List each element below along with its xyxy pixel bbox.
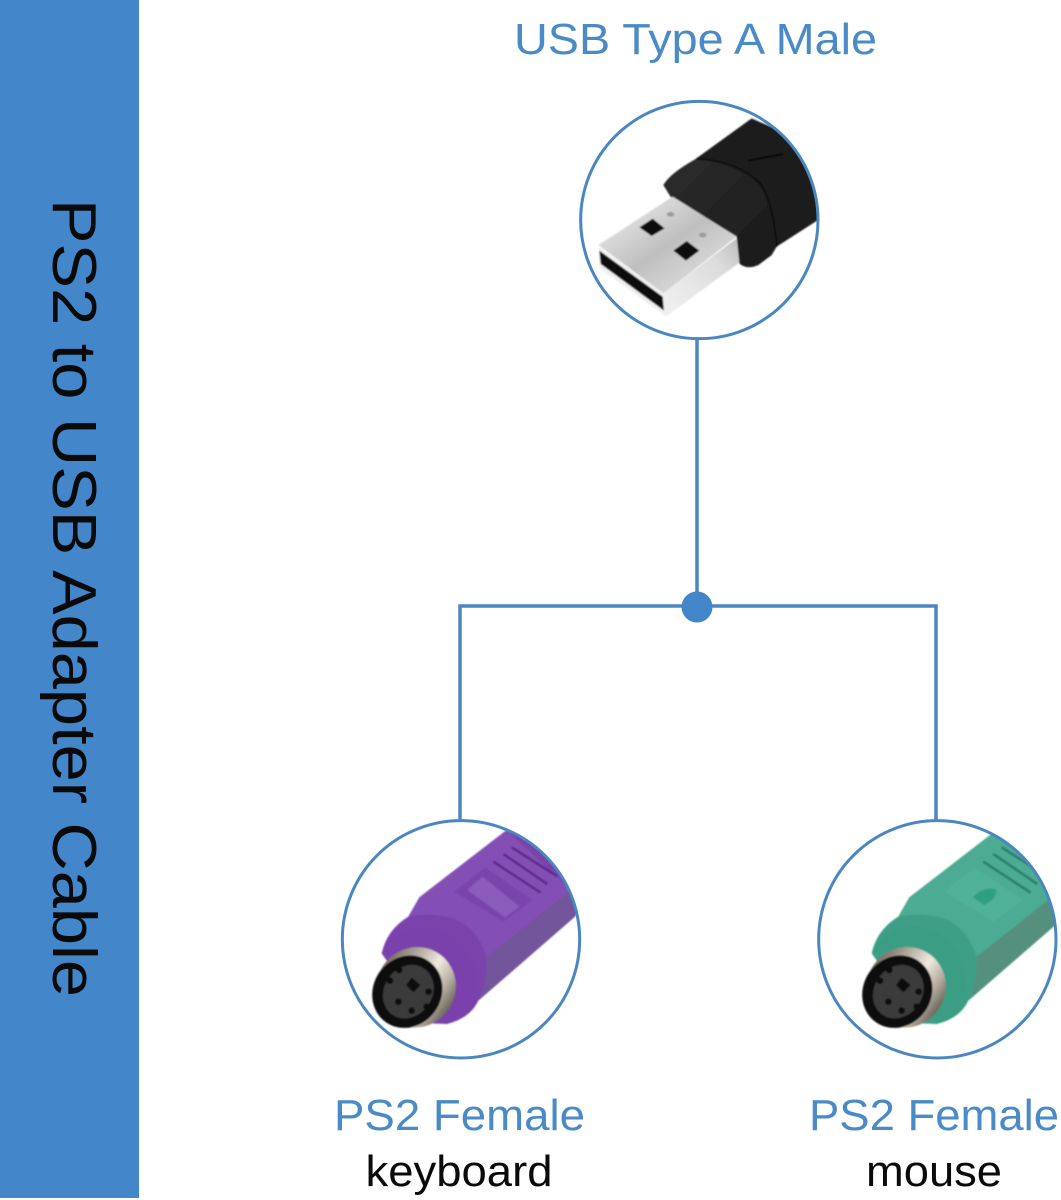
label: PS2 Female keyboard: PS2 Female [334, 1091, 585, 1140]
icon: purple PS2 keyboard connector circle [342, 821, 588, 1058]
label: PS2 Female mouse [809, 1091, 1059, 1196]
junction dot [682, 592, 712, 622]
heading: USB Type A Male: USB Type A Male [514, 15, 877, 64]
label: PS2 Female mouse: PS2 Female [809, 1091, 1059, 1140]
label: PS2 Female mouse: mouse [866, 1147, 1002, 1196]
icon: USB plug photo circle [581, 101, 823, 339]
icon: green PS2 mouse connector circle [819, 821, 1061, 1058]
sidebar title: PS2 to USB Adapter Cable [39, 199, 108, 997]
connector lines [460, 339, 936, 821]
label: PS2 Female keyboard [334, 1091, 585, 1196]
label: PS2 Female keyboard: keyboard [366, 1147, 552, 1196]
sidebar panel [0, 0, 139, 1198]
